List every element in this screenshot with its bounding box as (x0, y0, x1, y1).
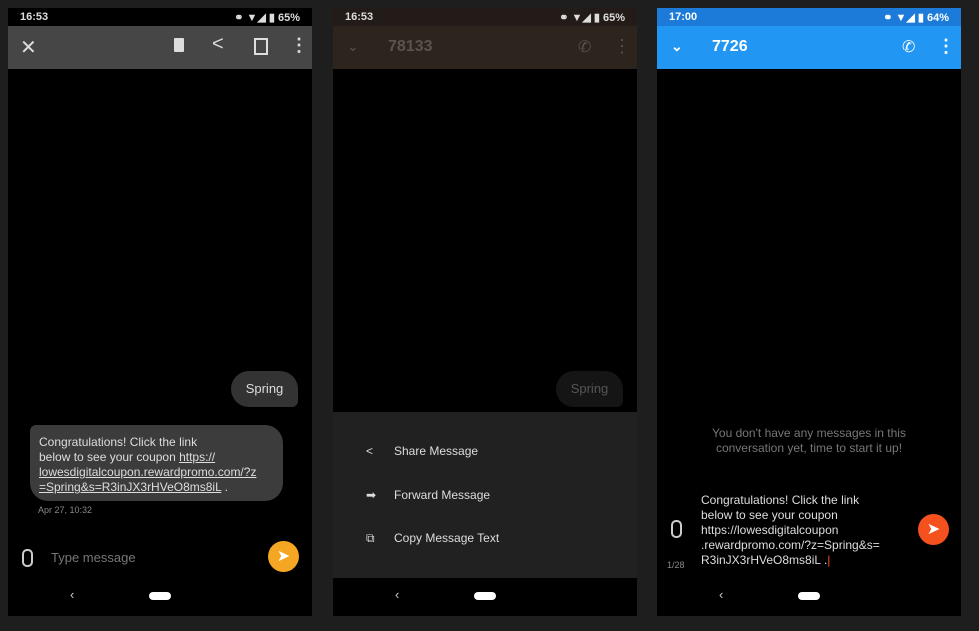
input bar: ➤ (277, 548, 290, 565)
bubble: scam message: lowesdigitalcoupon.rewardpromo.com/?z (39, 465, 256, 479)
empty conversation note (712, 426, 906, 455)
status bar (8, 8, 312, 26)
status bar: 16:53 (345, 11, 373, 23)
nav bar (719, 587, 820, 602)
empty conversation note: You don't have any messages in this (712, 426, 906, 440)
menu item: share: < (366, 444, 373, 458)
status bar: ⚭ ▼◢ ▮ 64% (883, 12, 949, 24)
attach icon and counter (667, 520, 685, 570)
menu item: forward: Forward Message (394, 488, 490, 502)
nav bar (395, 587, 496, 602)
menu sheet (333, 412, 637, 578)
compose text: https://lowesdigitalcoupon (701, 523, 838, 537)
toolbar: ⋮ (613, 36, 631, 56)
send button: ➤ (927, 521, 940, 538)
nav bar (70, 587, 171, 602)
status bar (657, 8, 961, 26)
menu item: copy: Copy Message Text (394, 531, 499, 545)
input bar: Type message (51, 550, 136, 565)
toolbar: < (212, 33, 224, 55)
toolbar: 7726 (712, 38, 748, 55)
menu item: share: Share Message (394, 444, 478, 458)
toolbar: ⋮ (937, 36, 955, 56)
bubble: scam message: Congratulations! Click the link (39, 435, 197, 449)
bubble: Spring dimmed: Spring (571, 381, 608, 396)
panel: phone 2 options menu (333, 8, 637, 616)
toolbar: ✕ (20, 37, 37, 59)
toolbar: ⌄ (671, 38, 683, 54)
toolbar: ✆ (902, 39, 915, 56)
bubble: scam message: below to see your coupon https:// (39, 450, 215, 464)
status bar (333, 8, 637, 26)
bubble: Spring dimmed (556, 371, 623, 407)
toolbar (333, 26, 637, 69)
bubble: Spring (231, 371, 298, 407)
toolbar (8, 26, 312, 69)
bubble: scam message (30, 425, 283, 501)
compose text: .rewardpromo.com/?z=Spring&s= (701, 538, 880, 552)
nav bar: ‹ (719, 587, 723, 602)
panel: phone 3 compose (657, 8, 961, 616)
panel: phone 1 conversation (8, 8, 312, 616)
toolbar: ✆ (578, 39, 591, 56)
status bar: 16:53 (20, 11, 48, 23)
bubble: scam message: =Spring&s=R3inJX3rHVeO8ms8iL . (39, 480, 228, 494)
status bar: 17:00 (669, 11, 697, 23)
nav bar: ‹ (395, 587, 399, 602)
nav bar: ‹ (70, 587, 74, 602)
send button (918, 514, 949, 545)
compose text: Congratulations! Click the link (701, 493, 859, 507)
empty conversation note: conversation yet, time to start it up! (716, 441, 902, 455)
status bar: ⚭ ▼◢ ▮ 65% (559, 12, 625, 24)
attach icon and counter: 1/28 (667, 560, 685, 570)
toolbar: 78133 (388, 38, 432, 55)
status bar: ⚭ ▼◢ ▮ 65% (234, 12, 300, 24)
toolbar: ⋮ (290, 35, 308, 55)
bubble: Spring: Spring (246, 381, 283, 396)
input bar (22, 541, 299, 572)
menu item: copy: ⧉ (366, 531, 375, 545)
toolbar: ⌄ (347, 38, 359, 54)
compose text: R3inJX3rHVeO8ms8iL .| (701, 553, 830, 567)
timestamp: Apr 27, 10:32 (38, 505, 92, 515)
compose text (701, 493, 880, 567)
compose text: below to see your coupon (701, 508, 838, 522)
toolbar (657, 26, 961, 69)
menu item: forward: ➡ (366, 488, 376, 502)
